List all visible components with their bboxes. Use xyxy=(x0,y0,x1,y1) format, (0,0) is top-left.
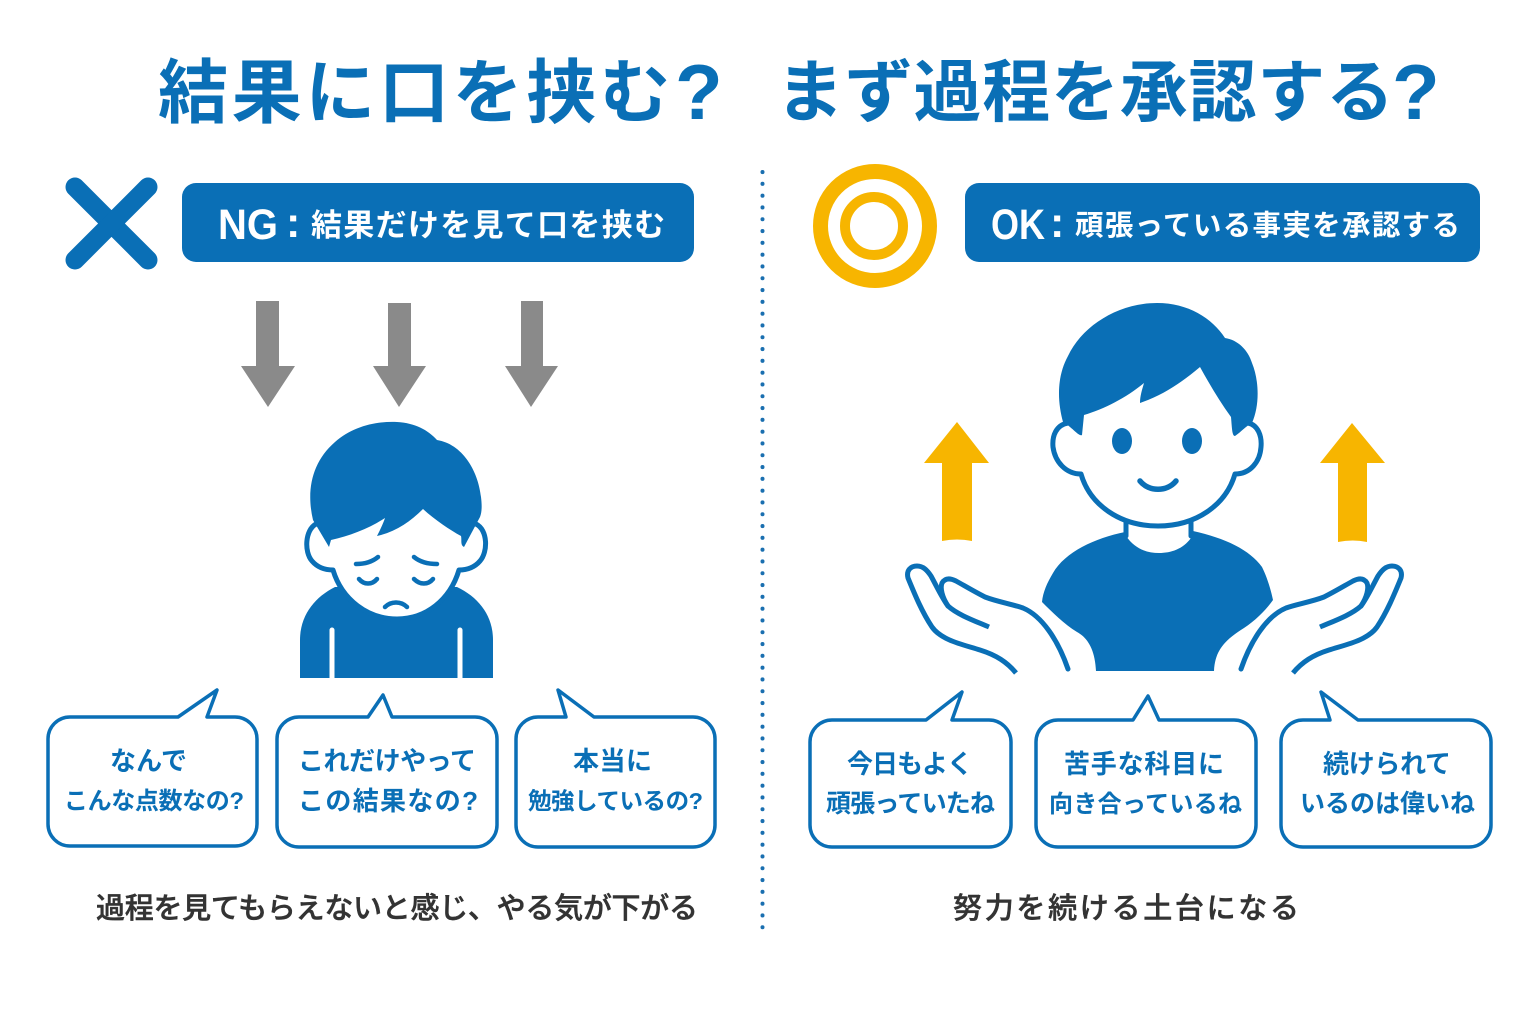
speech bubble: 3: 本当に xyxy=(573,746,652,776)
icon: smiling child xyxy=(1042,303,1273,671)
speech bubble: 4: 頑張っていたね xyxy=(826,790,995,818)
panel: NG xyxy=(48,183,715,925)
icon: left supporting hand xyxy=(908,566,1068,673)
icon: double circle xyxy=(820,172,930,280)
speech bubble: 5 xyxy=(1036,696,1256,847)
speech bubble: 6: 続けられて xyxy=(1323,749,1451,779)
speech bubble: 6: いるのは偉いね xyxy=(1300,790,1475,818)
NG header banner: : xyxy=(286,199,300,247)
title: left question: 結果に口を挟む xyxy=(158,54,670,132)
OK header banner xyxy=(965,183,1480,262)
gray down arrows xyxy=(241,301,558,407)
speech bubble: 2: これだけやって xyxy=(298,746,476,776)
speech bubble: 3 xyxy=(516,690,715,847)
caption: OK result: 努力を続ける土台になる xyxy=(953,892,1299,925)
icon: right supporting hand xyxy=(1241,566,1401,673)
icon: cross mark xyxy=(75,187,148,260)
speech bubble: 1: なんで xyxy=(110,746,187,776)
title: right question: まず過程を承認する xyxy=(776,55,1394,131)
NG header banner: 結果だけを見て口を挟む xyxy=(311,208,665,243)
panel: OK xyxy=(810,172,1491,925)
NG header banner: NG xyxy=(218,201,278,249)
title: right question: ? xyxy=(1392,48,1440,136)
center dotted divider xyxy=(760,172,764,930)
speech bubble: 4: 今日もよく xyxy=(847,749,973,779)
speech bubble: 2: この結果なの? xyxy=(298,786,478,816)
OK header banner: : xyxy=(1050,199,1064,247)
speech bubble: 5: 苦手な科目に xyxy=(1064,749,1224,779)
speech bubble: 1 xyxy=(48,690,257,846)
speech bubble: 3: 勉強しているの? xyxy=(528,788,703,814)
OK header banner: 頑張っている事実を承認する xyxy=(1075,210,1460,242)
icon: sad child xyxy=(300,422,493,678)
title: left question: ? xyxy=(675,48,723,136)
speech bubble: 6 xyxy=(1281,692,1491,847)
speech bubble: 5: 向き合っているね xyxy=(1049,791,1242,818)
speech bubble: 1: こんな点数なの? xyxy=(64,788,244,815)
caption: NG result: 過程を見てもらえないと感じ、やる気が下がる xyxy=(96,892,698,925)
NG header banner xyxy=(182,183,694,262)
OK header banner: OK xyxy=(991,201,1045,249)
speech bubble: 4 xyxy=(810,692,1011,847)
yellow up arrows xyxy=(924,422,1385,542)
speech bubble: 2 xyxy=(277,695,497,847)
